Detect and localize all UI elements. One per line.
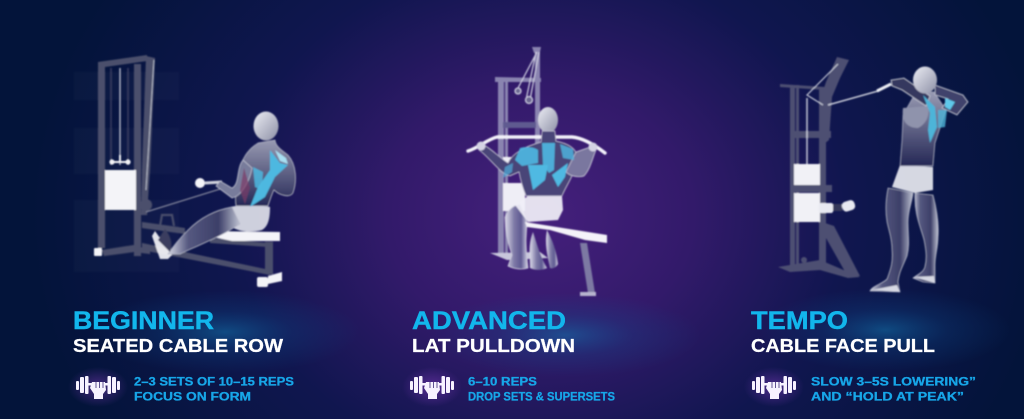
bench xyxy=(525,222,607,296)
cables xyxy=(807,64,891,164)
weight plates xyxy=(503,183,525,211)
legs xyxy=(870,188,913,292)
heading: ADVANCED xyxy=(412,307,566,335)
bar xyxy=(468,137,605,153)
shorts xyxy=(892,165,933,193)
detail text: FOCUS ON FORM xyxy=(134,390,251,404)
hands xyxy=(476,142,598,152)
weights and feet xyxy=(94,155,282,287)
arms xyxy=(891,78,930,106)
icon: dumbbell and fist xyxy=(68,367,128,407)
detail text: AND “HOLD AT PEAK” xyxy=(811,390,964,404)
lat muscles xyxy=(250,150,288,207)
detail text xyxy=(811,374,976,404)
detail text: SLOW 3–5S LOWERING” xyxy=(811,374,976,388)
head xyxy=(913,66,937,94)
torso and arms xyxy=(479,131,577,196)
faint backdrop blocks xyxy=(74,72,179,272)
heading: BEGINNER xyxy=(73,307,214,335)
detail text: DROP SETS & SUPERSETS xyxy=(468,390,615,404)
detail text xyxy=(468,374,615,404)
shorts xyxy=(515,196,563,222)
torso xyxy=(900,92,946,166)
detail text: 2–3 SETS OF 10–15 REPS xyxy=(134,374,294,388)
column: beginner xyxy=(68,307,294,407)
legs xyxy=(505,204,528,269)
detail text: 6–10 REPS xyxy=(468,374,537,388)
illustration: lat pulldown xyxy=(468,47,607,296)
back muscles xyxy=(923,95,937,143)
subheading: CABLE FACE PULL xyxy=(751,335,935,356)
icon: dumbbell and fist xyxy=(744,367,804,407)
column: advanced xyxy=(402,307,615,407)
body xyxy=(158,112,296,254)
lat muscles xyxy=(503,143,574,190)
icon: dumbbell and fist xyxy=(402,367,462,407)
blue glows xyxy=(90,288,1010,377)
detail text xyxy=(134,374,294,404)
machine frame xyxy=(98,55,273,275)
machine xyxy=(778,57,860,278)
weight plates xyxy=(794,164,820,222)
pads xyxy=(819,199,856,213)
subheading: LAT PULLDOWN xyxy=(412,335,575,356)
illustration: cable face pull xyxy=(778,57,968,292)
head xyxy=(538,107,558,133)
heading: TEMPO xyxy=(751,307,848,335)
cables xyxy=(515,52,539,104)
illustration: seated cable row xyxy=(74,55,296,287)
cables xyxy=(111,60,222,212)
column: tempo xyxy=(744,307,976,407)
subheading: SEATED CABLE ROW xyxy=(73,335,284,356)
machine xyxy=(490,47,548,260)
feet highlights xyxy=(872,276,935,292)
